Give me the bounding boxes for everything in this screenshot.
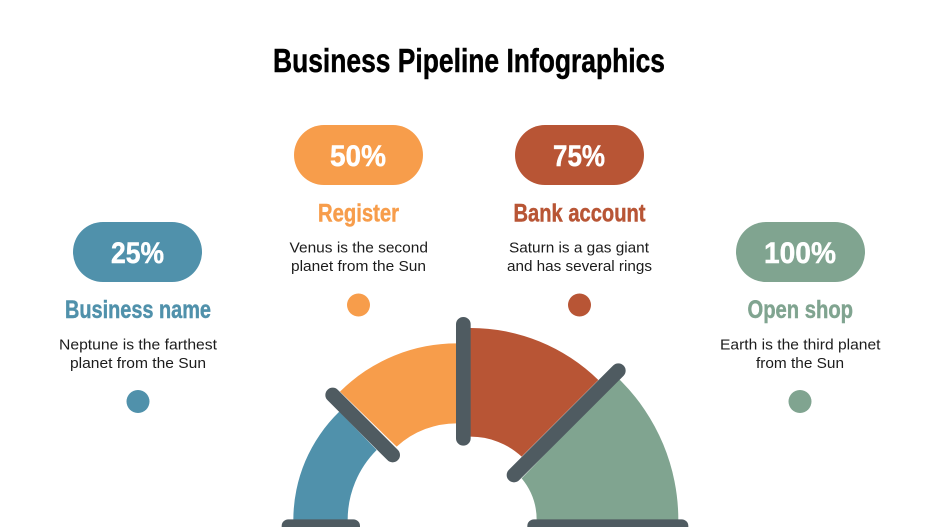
divider: vertical [441, 324, 485, 438]
base: left [282, 519, 360, 527]
pill: 75%: 75% [553, 140, 605, 173]
description: neptune: Neptune is the farthest [59, 336, 218, 354]
panel: business name 25% [59, 222, 218, 413]
title: Business Pipeline Infographics [273, 42, 665, 79]
description: venus: Venus is the second [290, 240, 428, 256]
description: venus: planet from the Sun [291, 258, 426, 275]
heading: register: Register [318, 200, 399, 228]
segment: orange 50% [340, 343, 458, 447]
pill: 50%: 50% [330, 140, 386, 173]
panel: register 50% [290, 125, 428, 316]
description: saturn [507, 240, 652, 275]
description: earth: from the Sun [756, 355, 844, 372]
description: saturn: and has several rings [507, 258, 652, 275]
pill: 25%: 25% [111, 237, 164, 270]
pill: 25% [73, 222, 202, 282]
description: venus [290, 240, 428, 275]
pill: 100%: 100% [764, 237, 836, 270]
segment: green 100% [522, 378, 678, 523]
divider: right diagonal [514, 371, 618, 475]
segment: blue 25% [293, 412, 377, 523]
pill: 100% [736, 222, 865, 282]
panel: bank account 75% [507, 125, 652, 316]
divider: left diagonal [333, 395, 393, 455]
pill: 50% [294, 125, 423, 185]
base: right [527, 519, 688, 527]
description: neptune: planet from the Sun [70, 355, 206, 372]
segment: red 75% [468, 328, 598, 457]
heading: business name: Business name [65, 296, 211, 324]
heading: open shop: Open shop [748, 296, 853, 324]
dot: orange marker [347, 294, 370, 316]
dot: red marker [568, 294, 591, 316]
panel: open shop 100% [720, 222, 881, 413]
description: neptune [59, 336, 218, 372]
description: saturn: Saturn is a gas giant [509, 240, 650, 256]
pill: 75% [515, 125, 644, 185]
heading: bank account: Bank account [514, 200, 646, 228]
dot: blue marker [126, 390, 150, 413]
description: earth [720, 336, 881, 372]
dot: green marker [788, 390, 812, 413]
description: earth: Earth is the third planet [720, 336, 881, 354]
chart: pipeline gauge [282, 324, 688, 527]
